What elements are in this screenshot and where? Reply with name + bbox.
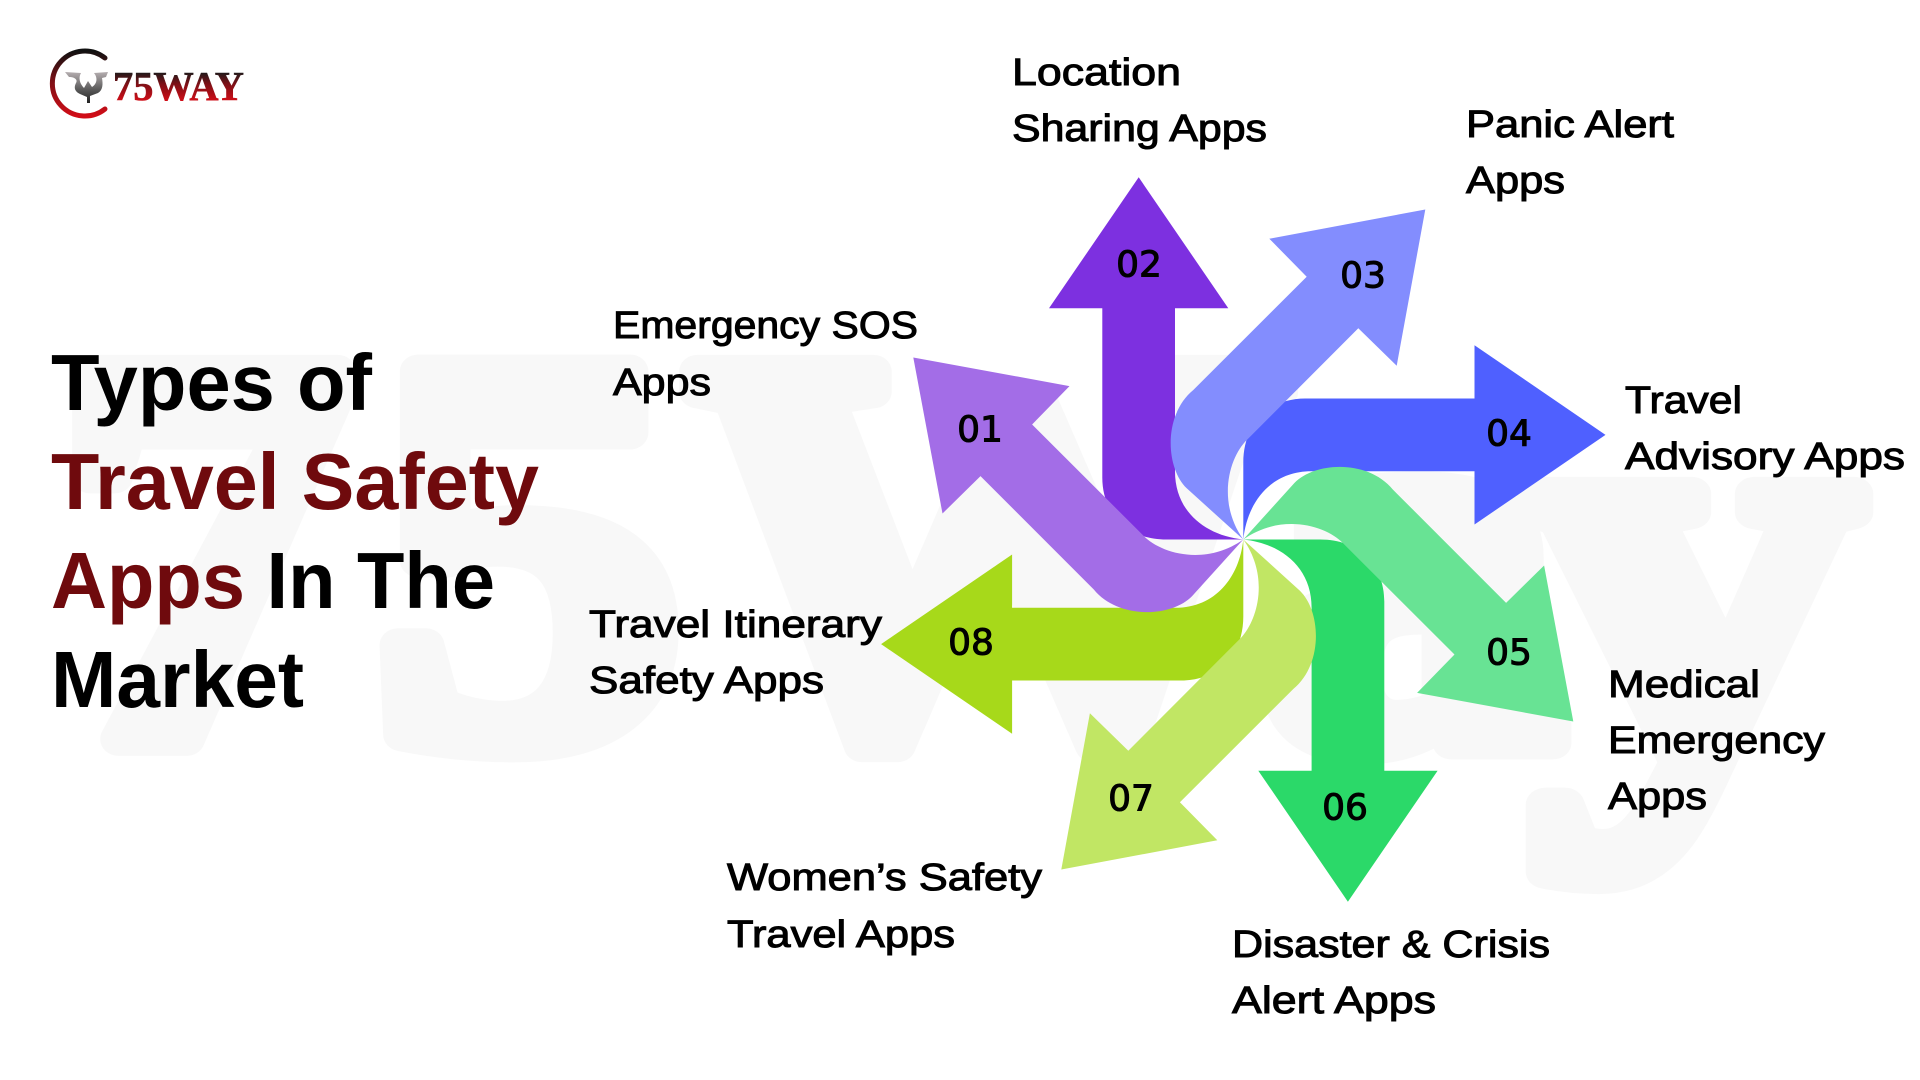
number 07: 07: [1108, 778, 1154, 820]
arrow 05: down-right, mint: [1243, 467, 1573, 722]
label: Travel Advisory Apps: [1625, 380, 1905, 478]
arrow 06: down, green: [1243, 540, 1438, 902]
title: Types of: [51, 338, 372, 427]
label: Panic Alert Apps: Apps: [1466, 160, 1565, 202]
label: Women's Safety Travel Apps: Women’s Safety: [727, 857, 1042, 899]
logo: 75Way: [52, 51, 244, 116]
label: Emergency SOS Apps: Apps: [613, 362, 711, 404]
label: Panic Alert Apps: [1466, 104, 1674, 202]
label: Travel Itinerary Safety Apps: Travel Itinerary: [589, 604, 882, 646]
label: Location Sharing Apps: Location: [1012, 52, 1181, 94]
label: Disaster & Crisis Alert Apps: Alert Apps: [1232, 980, 1436, 1022]
watermark: 75Way: W: [689, 240, 1290, 858]
arrow 03: up-right, periwinkle: [1171, 210, 1425, 540]
label: Travel Itinerary Safety Apps: [589, 604, 882, 702]
label: Women's Safety Travel Apps: [727, 857, 1042, 956]
logo wordmark: 75WAY: [113, 63, 244, 109]
number 02: 02: [1116, 244, 1162, 286]
number 01: 01: [957, 410, 1003, 450]
label: Location Sharing Apps: [1012, 52, 1267, 150]
title: Apps In The: [51, 536, 495, 625]
label: Women's Safety Travel Apps: Travel Apps: [727, 914, 955, 956]
label: Disaster & Crisis Alert Apps: [1232, 924, 1550, 1022]
watermark: 75Way: 5: [373, 239, 683, 862]
logo icon: ring and trident: [52, 51, 108, 116]
arrow 08: left, lime: [881, 540, 1243, 734]
arrow 04: right, blue: [1243, 345, 1606, 540]
title: Travel Safety: [51, 437, 539, 526]
label: Travel Advisory Apps: Travel: [1625, 380, 1742, 422]
number 08: 08: [948, 622, 994, 664]
number 03: 03: [1340, 256, 1386, 296]
label: Emergency SOS Apps: Emergency SOS: [613, 305, 918, 347]
label: Travel Itinerary Safety Apps: Safety Apps: [589, 660, 824, 702]
label: Emergency SOS Apps: [613, 305, 918, 404]
label: Medical Emergency Apps: Apps: [1608, 776, 1707, 818]
label: Disaster & Crisis Alert Apps: Disaster & Crisis: [1232, 924, 1550, 966]
label: Medical Emergency Apps: Emergency: [1608, 720, 1825, 762]
watermark: 75Way: y: [1530, 249, 1860, 879]
label: Travel Advisory Apps: Advisory Apps: [1625, 436, 1905, 478]
arrow 01: up-left, light purple: [913, 358, 1243, 612]
number 04: 04: [1486, 414, 1532, 454]
label: Medical Emergency Apps: [1608, 664, 1825, 818]
watermark: 75Way: 7: [56, 239, 353, 860]
number 05: 05: [1486, 632, 1532, 674]
title: [51, 338, 539, 724]
arrow 07: down-left, light lime: [1061, 540, 1316, 870]
watermark: 75Way: [56, 239, 1860, 879]
label: Location Sharing Apps: Sharing Apps: [1012, 108, 1267, 150]
number 06: 06: [1322, 788, 1368, 828]
arrow 02: up, purple: [1049, 177, 1243, 540]
watermark: 75Way: a: [1259, 258, 1563, 861]
label: Panic Alert Apps: Panic Alert: [1466, 104, 1674, 146]
label: Medical Emergency Apps: Medical: [1608, 664, 1760, 706]
title: Market: [51, 635, 304, 724]
